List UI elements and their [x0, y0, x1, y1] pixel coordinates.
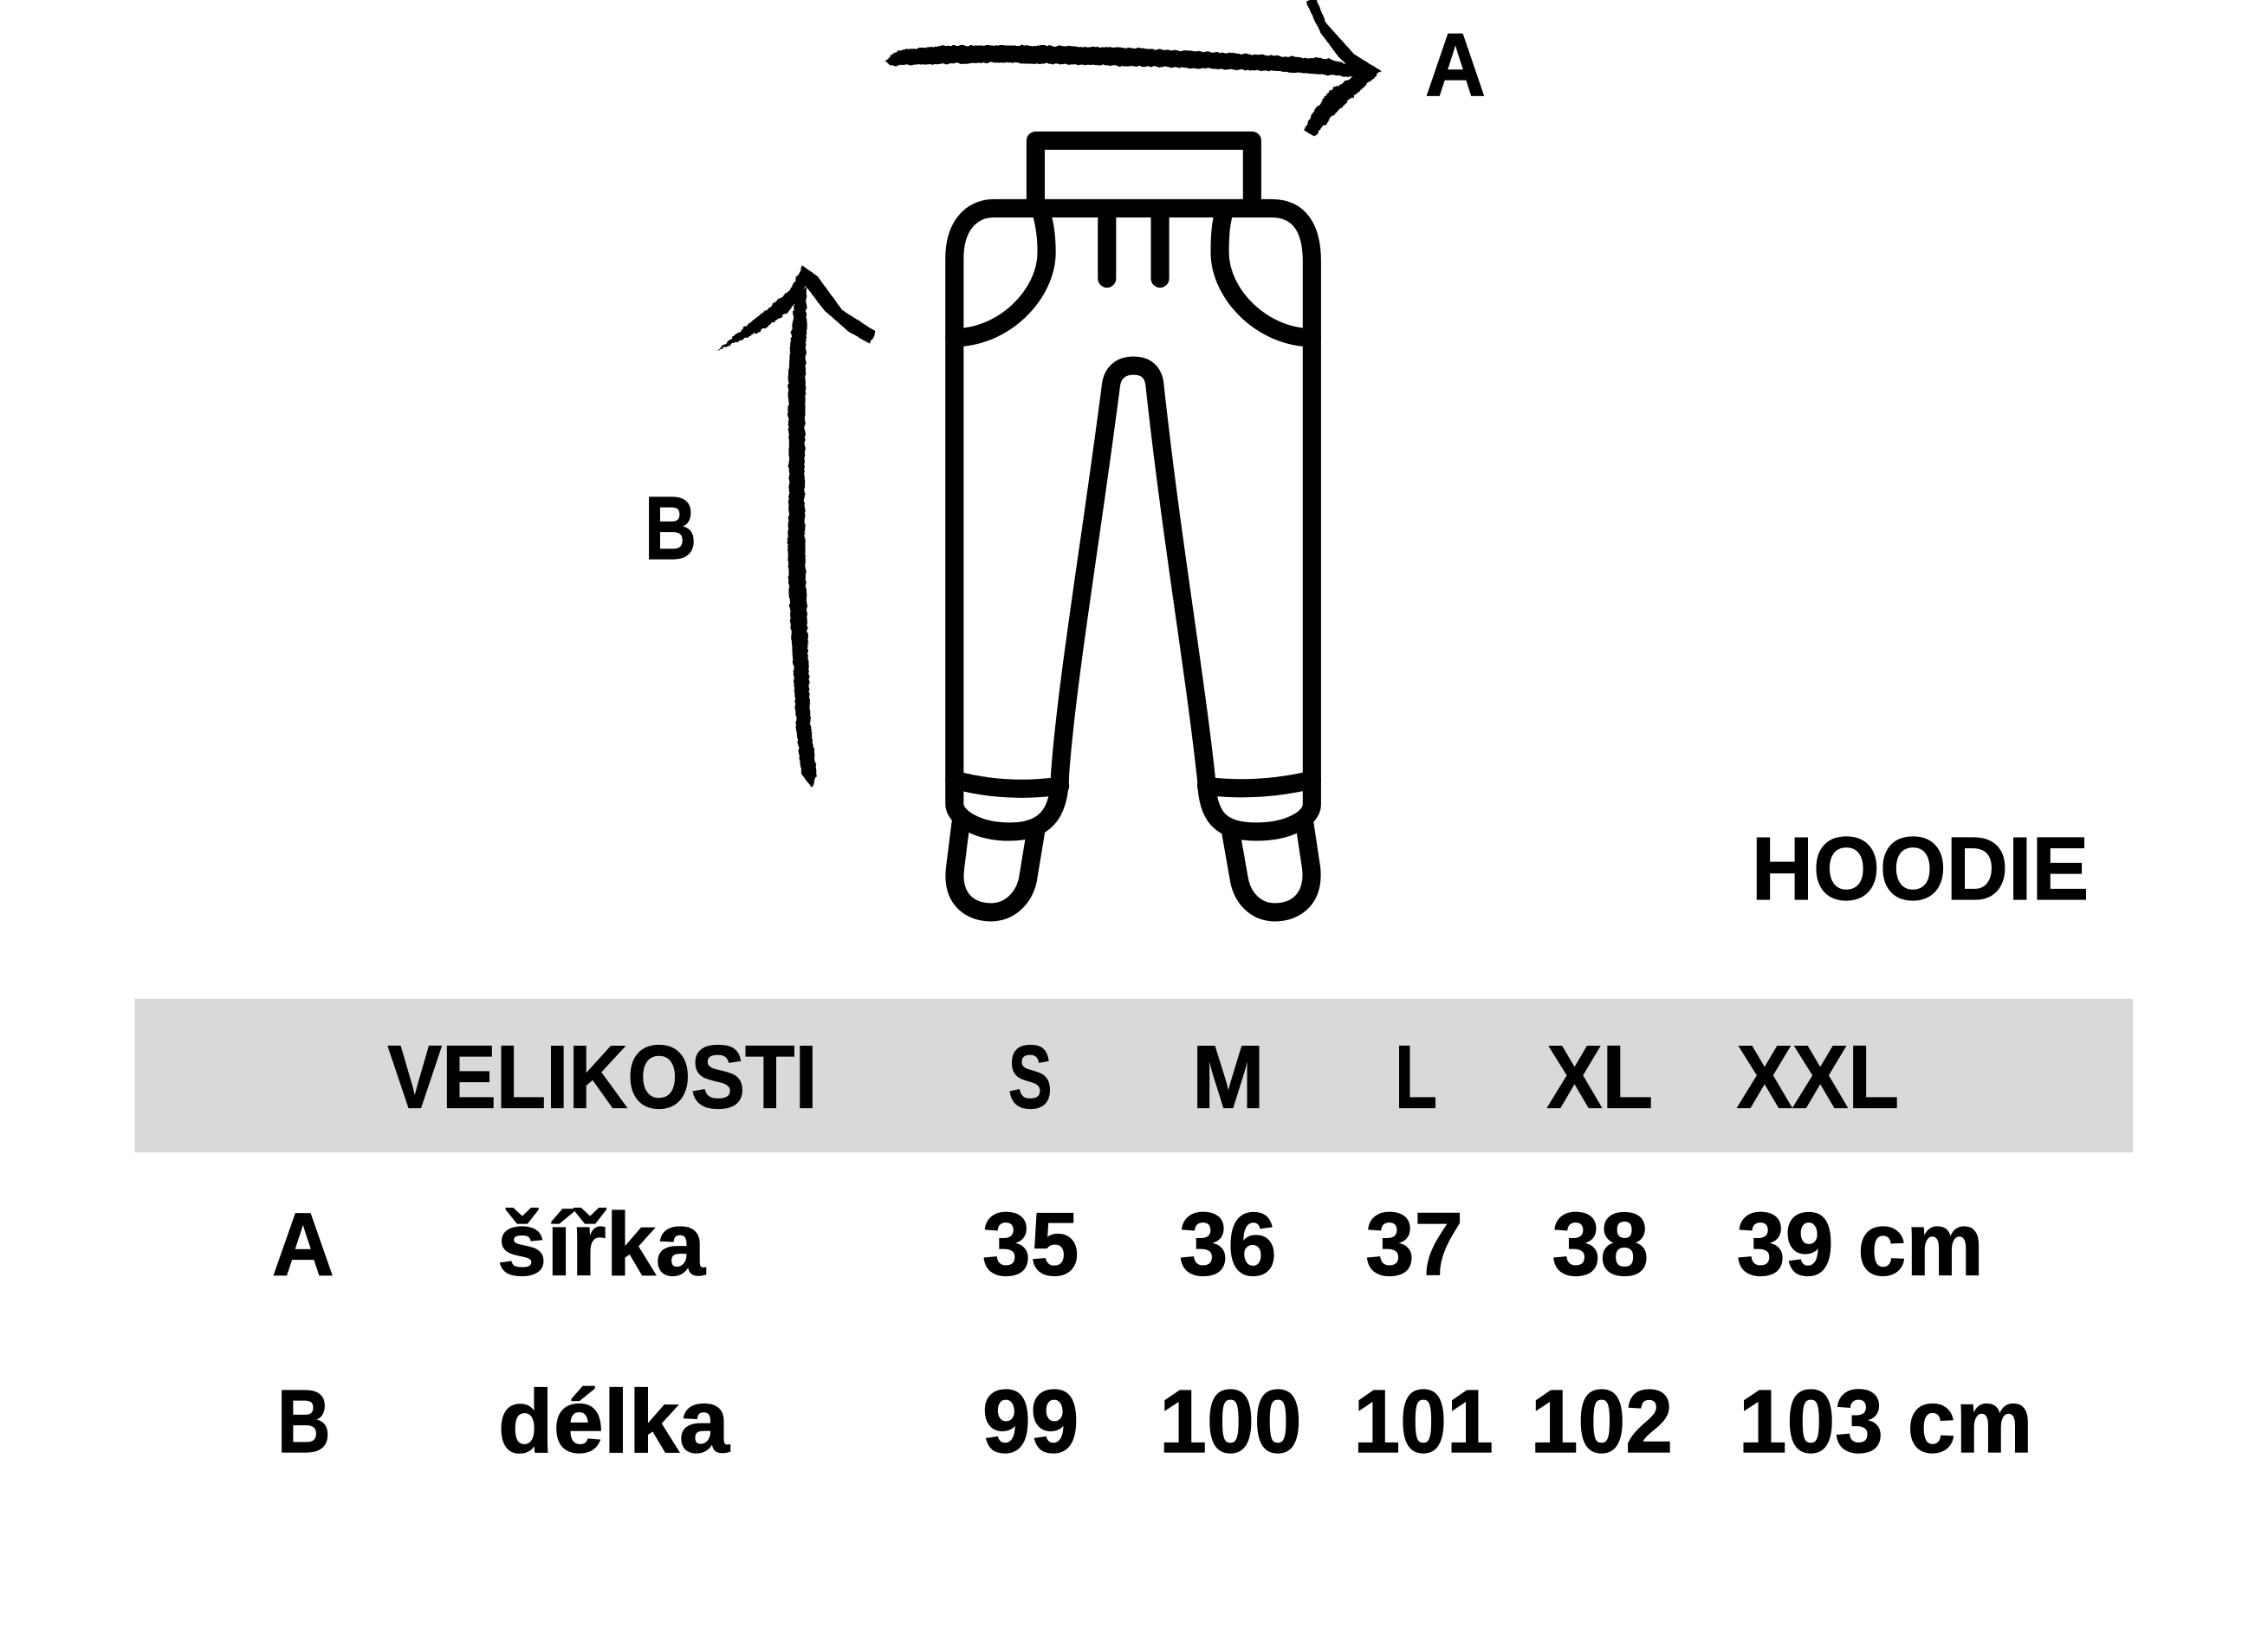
- table header band: [134, 999, 2133, 1152]
- table header row: M: [1192, 1027, 1265, 1126]
- waistband: [1035, 140, 1252, 206]
- table row B: length: [277, 1371, 2033, 1471]
- table header row: VELIKOSTI: [387, 1027, 818, 1126]
- arrow: length B: [717, 266, 876, 788]
- label: A: A: [1425, 15, 1486, 114]
- table header row: L: [1395, 1027, 1437, 1126]
- table row A: width: A: [272, 1195, 334, 1294]
- pockets: [955, 210, 1312, 338]
- table header row: [387, 1027, 1899, 1126]
- table row A: width: šířka: [497, 1195, 706, 1294]
- table header row: XXL: [1737, 1027, 1899, 1126]
- table row B: length: 100: [1159, 1371, 1302, 1471]
- arrow: width A: [885, 0, 1382, 136]
- table header row: XL: [1547, 1027, 1653, 1126]
- table row A: width: 38: [1552, 1195, 1649, 1294]
- icon: pants outline: [955, 140, 1312, 912]
- table row A: width: 35: [982, 1195, 1079, 1294]
- feet: [955, 820, 1312, 912]
- table and heading block: [134, 819, 2133, 1471]
- table row B: length: B: [277, 1371, 331, 1471]
- table row A: width: [272, 1195, 1984, 1294]
- table row B: length: 102: [1531, 1371, 1673, 1471]
- cuff seams: [955, 780, 1312, 788]
- illustration: pants with measurement arrows: [717, 0, 1382, 912]
- table row B: length: 101: [1353, 1371, 1494, 1471]
- heading: HOODIE: HOODIE: [1752, 819, 2089, 918]
- pants body: [955, 208, 1312, 832]
- table row B: length: 99: [982, 1371, 1079, 1471]
- table header row: S: [1008, 1027, 1053, 1126]
- table row B: length: délka: [498, 1371, 730, 1471]
- drawstrings: [1107, 210, 1160, 278]
- label: B: B: [645, 478, 697, 578]
- table row A: width: 36: [1179, 1195, 1277, 1294]
- table row A: width: 37: [1365, 1195, 1463, 1294]
- table row A: width: 39 cm: [1737, 1195, 1984, 1294]
- table row B: length: 103 cm: [1739, 1371, 2033, 1471]
